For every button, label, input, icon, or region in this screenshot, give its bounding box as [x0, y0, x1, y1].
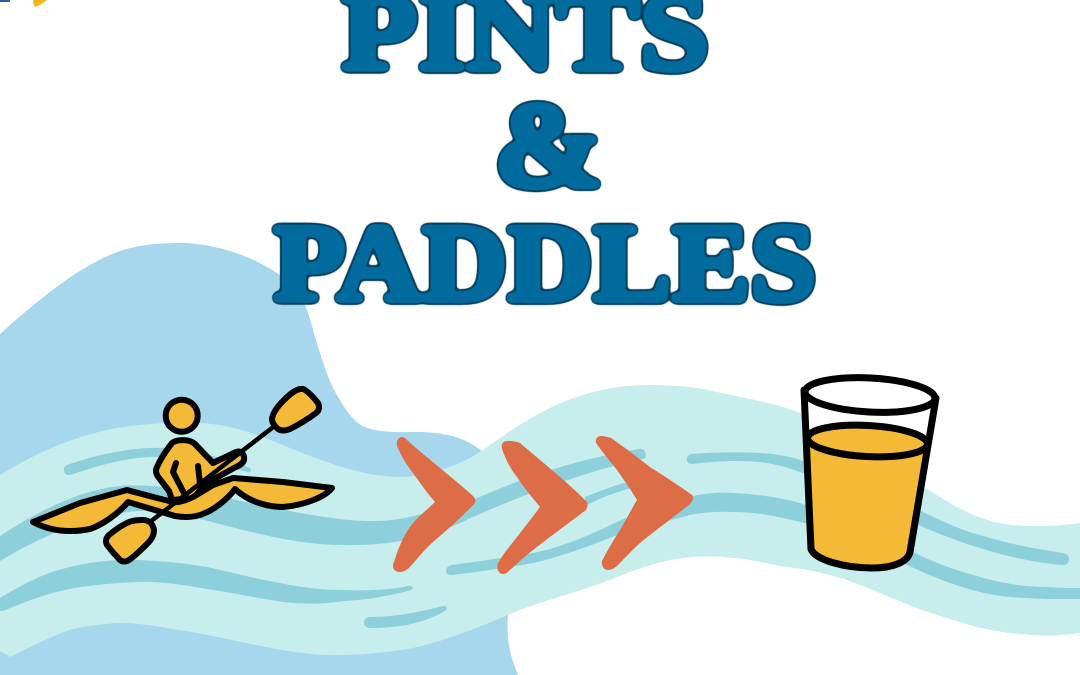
wave stripe: lower left: [0, 560, 413, 611]
paddle shaft: [150, 428, 272, 522]
arrow: chevron 3: [596, 436, 693, 570]
title: [273, 0, 816, 324]
corner logo fragment: blue: [0, 0, 10, 2]
beer surface: [807, 422, 928, 460]
title line: ampersand: &: [494, 78, 604, 213]
wave: pale teal river: [0, 385, 1080, 657]
corner logo fragment: yellow: [33, 0, 47, 7]
arrow: chevron 2: [497, 441, 588, 574]
glass interior: [804, 392, 936, 450]
icon: glass of beer: [804, 375, 936, 568]
arrow: chevron 1: [393, 437, 475, 572]
glass rim: [804, 375, 936, 415]
wave stripe: long middle left: [0, 449, 646, 561]
background blob: light blue: [0, 243, 518, 675]
wave stripe: short bottom: [364, 606, 447, 628]
wave stripe: long lower right: [446, 493, 1080, 599]
kayaker head: [166, 400, 198, 432]
paddle lower blade: [106, 520, 154, 562]
paddle upper blade: [272, 389, 319, 430]
kayak hull: [33, 478, 332, 531]
wave stripe: short between chevrons: [585, 479, 640, 506]
kayaker arm line: [173, 463, 200, 497]
title line: PADDLES: PADDLES: [273, 202, 816, 324]
kayaker body: [156, 440, 244, 500]
wave stripe: short upper left: [64, 448, 251, 475]
icon: kayaker: [33, 389, 332, 562]
beer fill: [807, 424, 927, 568]
glass outline: [804, 390, 936, 568]
wave stripe: long upper right: [687, 452, 1069, 565]
